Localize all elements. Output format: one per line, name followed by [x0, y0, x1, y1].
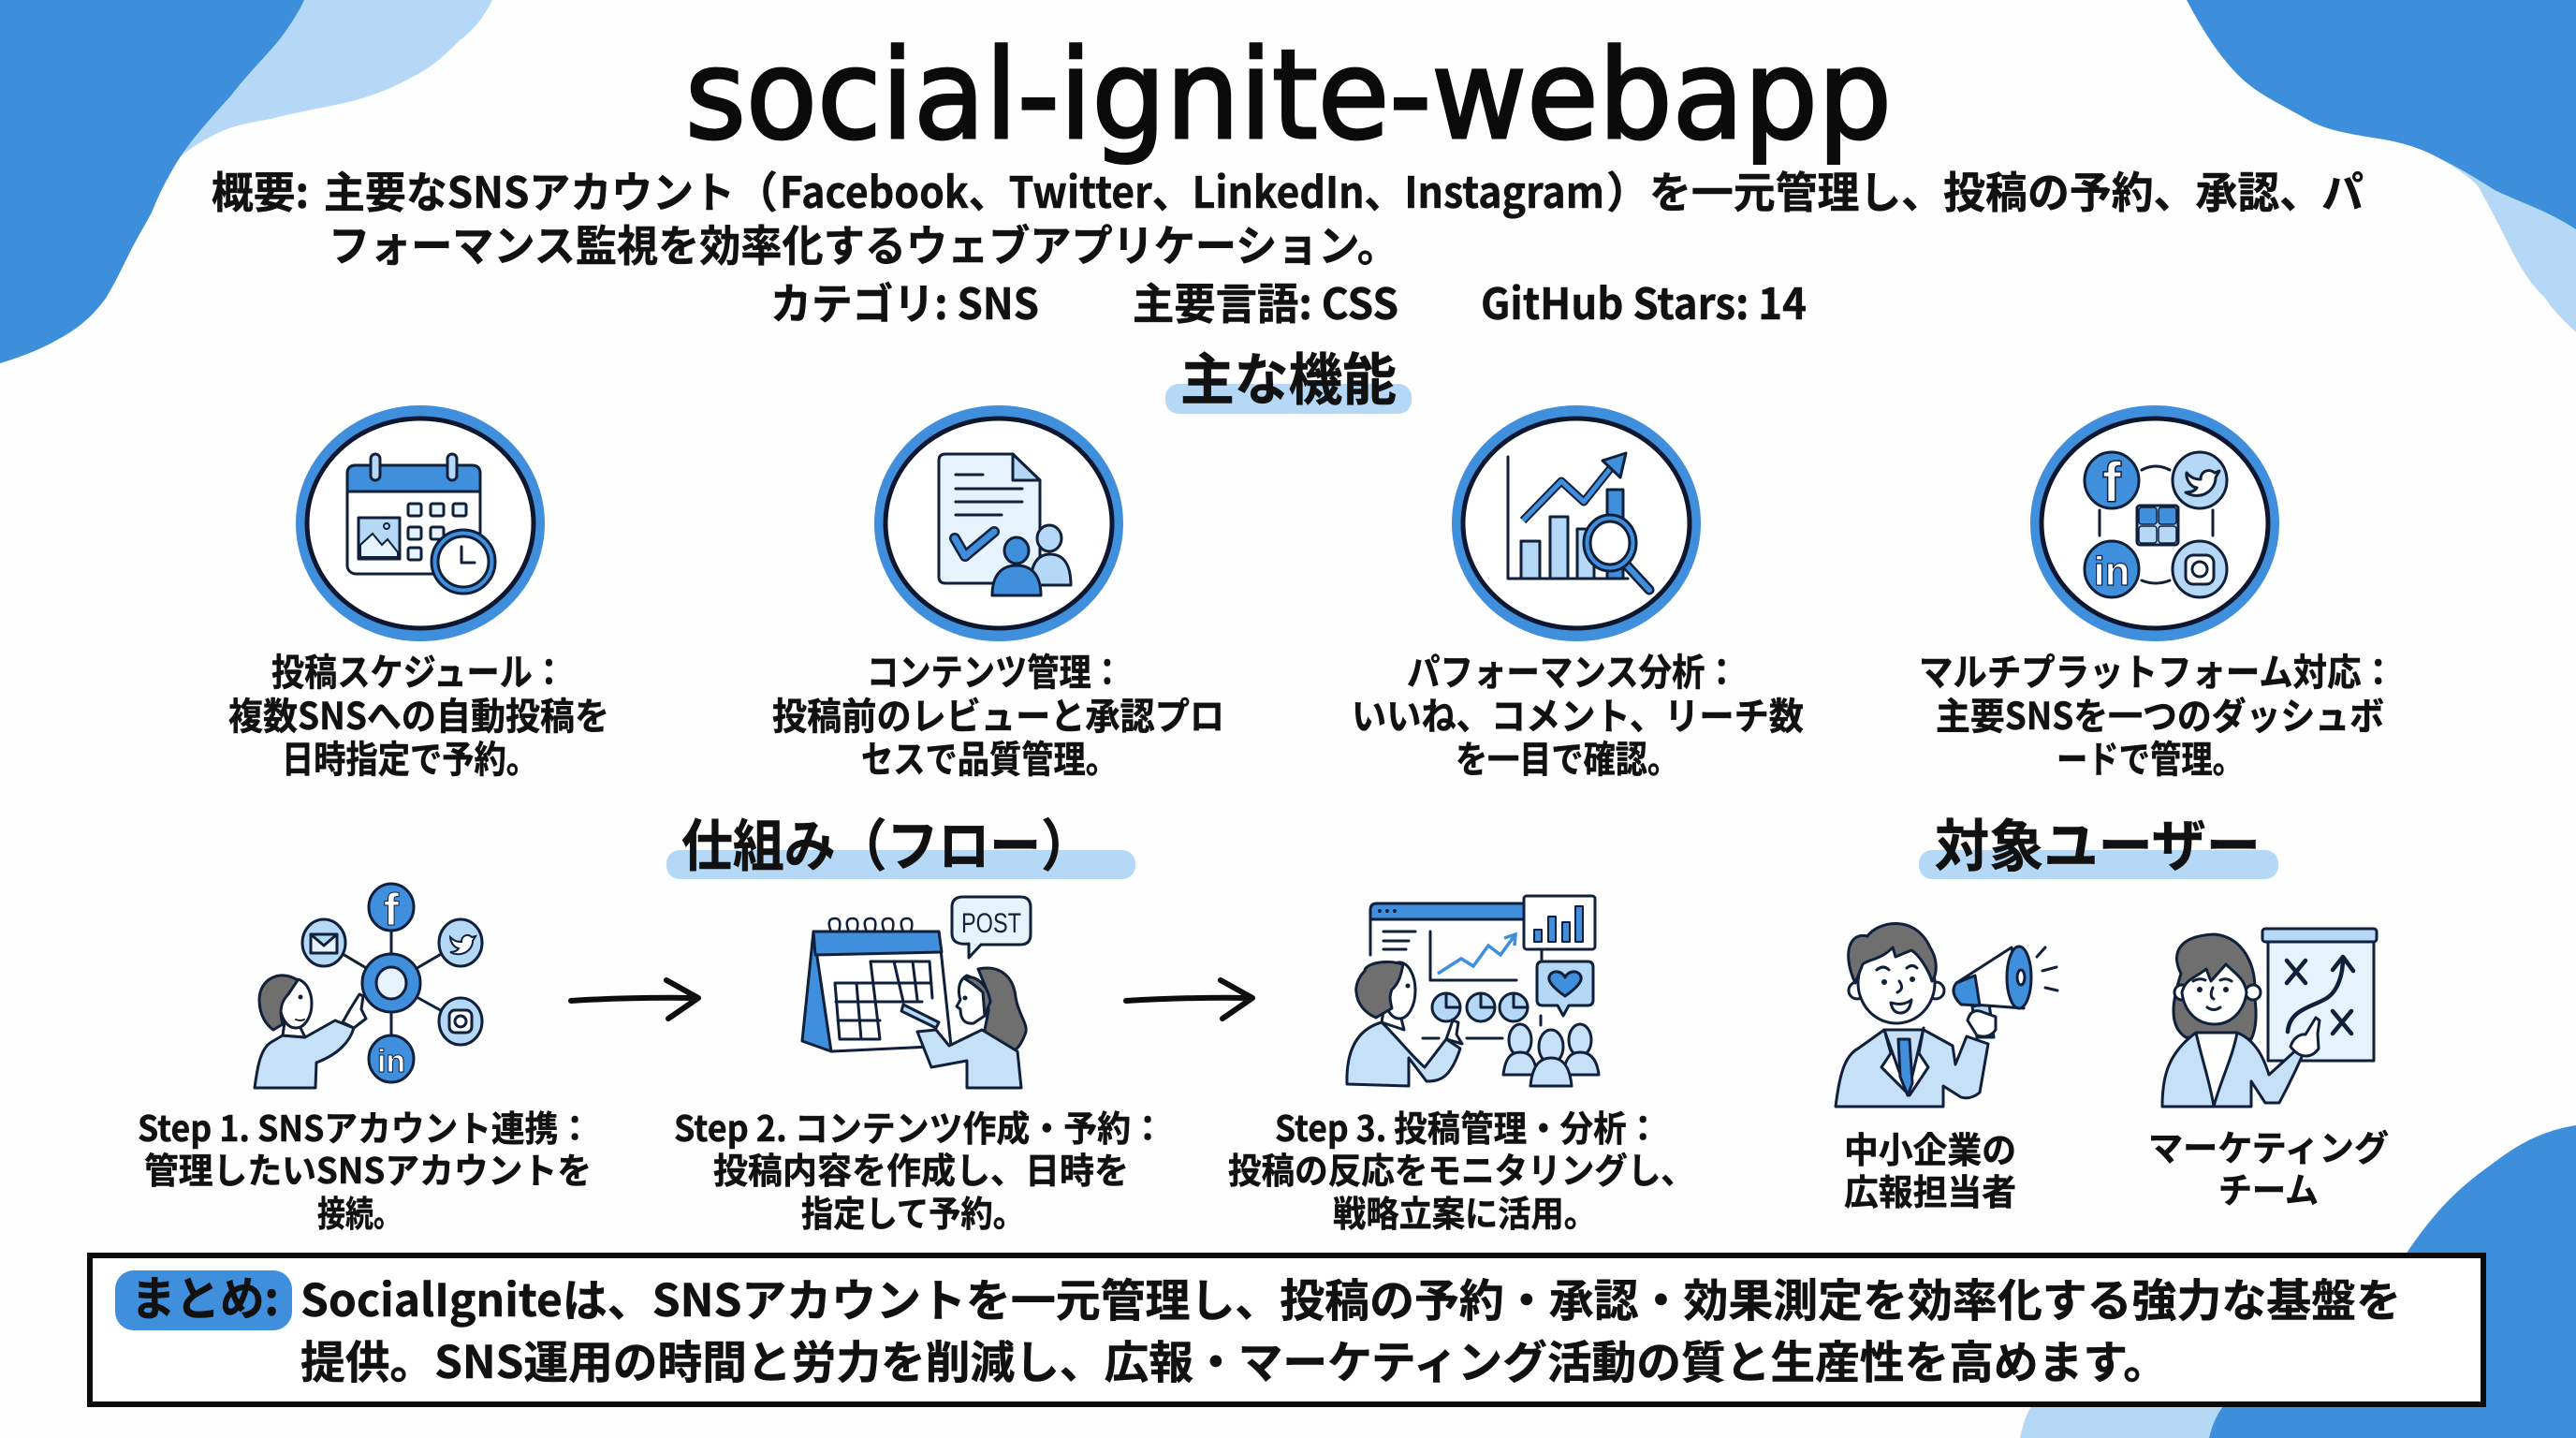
step 3 [1228, 896, 1694, 1237]
step 2 [674, 897, 1164, 1237]
arrow: step 2 to step 3 [1126, 980, 1252, 1019]
summary text [300, 1264, 2401, 1391]
heading: features: 主な機能 [1180, 335, 1397, 417]
background blob: top right dark [2187, 0, 2576, 229]
icon: calendar with clock [301, 411, 539, 636]
illustration: monitoring dashboard [1347, 896, 1599, 1086]
background blob: bottom right dark [2209, 1125, 2576, 1438]
panel: multi-platform [1919, 411, 2395, 784]
background blob: top right light [2437, 157, 2576, 332]
caption: content management: 投稿前のレビューと承認プロ [772, 686, 1224, 741]
caption: step 3: Step 3. 投稿管理・分析： [1275, 1100, 1660, 1152]
caption: step 2: Step 2. コンテンツ作成・予約： [674, 1100, 1164, 1152]
label: PR staff: 中小企業の [1844, 1122, 2016, 1173]
caption: multi-platform: マルチプラットフォーム対応： [1919, 642, 2395, 697]
overview text: フォーマンス監視を効率化するウェブアプリケーション。 [329, 213, 1398, 274]
caption: step 2: 指定して予約。 [801, 1185, 1025, 1237]
caption: content management: コンテンツ管理： [867, 642, 1123, 697]
summary badge: まとめ: [131, 1262, 279, 1329]
caption: step 1 [138, 1100, 592, 1237]
summary text: 提供。SNS運用の時間と労力を削減し、広報・マーケティング活動の質と生産性を高めます。 [300, 1326, 2168, 1391]
panel: post schedule [228, 411, 609, 784]
icon: social network hub [2036, 411, 2274, 636]
background blob: bottom right light [2020, 1386, 2284, 1438]
overview text: Facebook、Twitter、LinkedIn、Instagram [780, 159, 1604, 221]
label: marketing team [2148, 1120, 2389, 1213]
step 1 [138, 884, 592, 1237]
overview text: 主要なSNSアカウント [324, 159, 735, 221]
caption: performance analysis: いいね、コメント、リーチ数 [1352, 686, 1804, 741]
project metadata: GitHub Stars: 14 [1481, 271, 1807, 332]
caption: step 1: 接続。 [317, 1185, 402, 1237]
background blob: top left dark [0, 0, 304, 363]
caption: performance analysis: パフォーマンス分析： [1407, 642, 1738, 697]
illustration: woman with strategy board [2162, 929, 2377, 1107]
caption: post schedule: 複数SNSへの自動投稿を [228, 686, 609, 741]
caption: multi-platform [1919, 642, 2395, 784]
illustration: connecting accounts: f [384, 886, 400, 935]
caption: step 2: 投稿内容を作成し、日時を [713, 1142, 1129, 1194]
background blob: top left light [181, 0, 492, 156]
icon: social network hub: f [2102, 451, 2122, 514]
project metadata: カテゴリ: SNS [770, 271, 1039, 332]
illustration: connecting accounts [255, 884, 482, 1088]
caption: step 3: 投稿の反応をモニタリングし、 [1228, 1142, 1694, 1194]
caption: content management: セスで品質管理。 [861, 729, 1118, 784]
panel: content management [772, 411, 1224, 784]
caption: step 2 [674, 1100, 1164, 1237]
overview text: （ [735, 159, 778, 221]
summary text: SocialIgniteは、SNSアカウントを一元管理し、投稿の予約・承認・効果測定を効率化する強力な基盤を [300, 1264, 2401, 1329]
label: marketing team: マーケティング [2148, 1120, 2389, 1171]
caption: step 3 [1228, 1100, 1694, 1237]
overview text: を一元管理し、投稿の予約、承認、パ [1649, 159, 2364, 221]
caption: step 1: 管理したいSNSアカウントを [144, 1142, 592, 1194]
project metadata [770, 271, 1807, 332]
arrow: step 1 to step 2 [571, 980, 698, 1019]
label: PR staff [1844, 1122, 2016, 1215]
project metadata: 主要言語: CSS [1133, 271, 1398, 332]
caption: post schedule: 日時指定で予約。 [282, 729, 538, 784]
heading: how it works: 仕組み（フロー） [681, 801, 1092, 883]
caption: step 1: Step 1. SNSアカウント連携： [138, 1100, 592, 1152]
user: marketing team [2148, 929, 2389, 1213]
illustration: connecting accounts: in [377, 1044, 405, 1079]
title: social-ignite-webapp [685, 23, 1892, 168]
user: PR staff [1836, 923, 2057, 1215]
overview text [212, 159, 2364, 274]
caption: step 3: 戦略立案に活用。 [1333, 1185, 1597, 1237]
caption: content management [772, 642, 1224, 784]
illustration: man with megaphone [1836, 923, 2057, 1107]
overview text: 概要: [212, 159, 309, 221]
illustration: calendar and post [802, 897, 1031, 1088]
label: marketing team: チーム [2218, 1162, 2319, 1213]
caption: multi-platform: ードで管理。 [2056, 729, 2244, 784]
caption: performance analysis: を一目で確認。 [1456, 729, 1679, 784]
icon: chart with magnifier [1457, 411, 1695, 636]
panel: performance analysis [1352, 411, 1804, 784]
caption: multi-platform: 主要SNSを一つのダッシュボ [1936, 686, 2384, 741]
illustration: calendar and post: POST [961, 908, 1021, 939]
panel: summary [90, 1255, 2483, 1404]
caption: post schedule [228, 642, 609, 784]
icon: document with check and people [880, 411, 1118, 636]
overview text: ） [1606, 159, 1649, 221]
icon: social network hub: in [2093, 549, 2130, 594]
caption: post schedule: 投稿スケジュール： [271, 642, 565, 697]
caption: performance analysis [1352, 642, 1804, 784]
label: PR staff: 広報担当者 [1844, 1164, 2016, 1215]
heading: target users: 対象ユーザー [1935, 801, 2261, 883]
